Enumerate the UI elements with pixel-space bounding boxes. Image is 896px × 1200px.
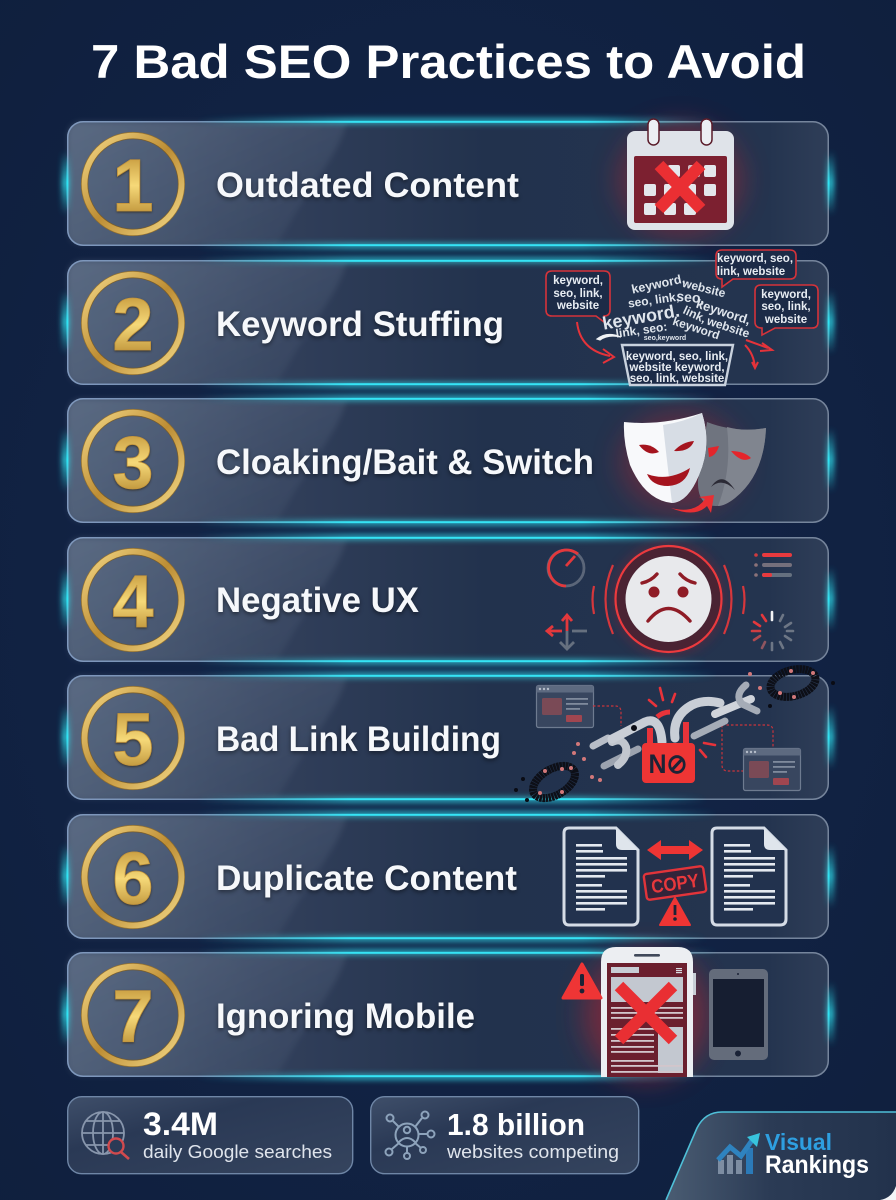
number badge 2: 2 xyxy=(112,283,154,366)
icon: globe with magnifier xyxy=(82,1112,129,1159)
panel: logo: Rankings xyxy=(765,1151,869,1179)
tablet xyxy=(709,969,768,1060)
number badge 1: 1 xyxy=(112,144,154,227)
icon: broken chain and lock xyxy=(514,664,835,805)
swirling words: keyword, xyxy=(630,272,686,297)
heading: outdated content: Outdated Content xyxy=(216,166,519,205)
icon: calendar with X xyxy=(618,119,742,236)
icon: sad face xyxy=(547,543,793,655)
number badge 5 xyxy=(81,686,185,790)
swirling words: link, xyxy=(681,303,709,326)
website windows xyxy=(536,686,594,728)
number badge 3 xyxy=(81,409,185,513)
icon: keyword cloud and bubbles: website keyword, xyxy=(628,362,725,374)
double arrow xyxy=(647,840,703,860)
swirling words: website xyxy=(680,276,727,300)
number badge 7: 7 xyxy=(112,975,154,1058)
heading: ignoring mobile: Ignoring Mobile xyxy=(216,997,475,1036)
swirling words: seo, xyxy=(676,288,705,306)
icon: keyword cloud and bubbles: seo, link, website xyxy=(630,373,724,385)
stat label: daily Google searches xyxy=(143,1142,332,1162)
icon: keyword cloud and bubbles: keyword, seo, link, xyxy=(626,351,728,363)
panel: 4 negative UX xyxy=(62,534,834,665)
panel: stat searches xyxy=(68,1097,353,1174)
panel: stat websites xyxy=(371,1097,639,1174)
number badge 4: 4 xyxy=(112,560,154,643)
heading: keyword stuffing: Keyword Stuffing xyxy=(216,305,504,344)
bubble left: website xyxy=(556,300,599,312)
swap arrow xyxy=(671,495,714,513)
bubble top right xyxy=(716,250,796,287)
title: 7 Bad SEO Practices to Avoid xyxy=(91,35,806,88)
bubble right: keyword, xyxy=(761,289,811,301)
number badge 5: 5 xyxy=(112,698,154,781)
bubble right: seo, link, xyxy=(761,301,811,313)
swirling words: keyword xyxy=(671,314,722,342)
stat label: websites competing xyxy=(446,1142,619,1162)
container xyxy=(622,345,733,385)
warning triangle xyxy=(563,964,601,998)
arrows xyxy=(577,322,772,368)
bubble left: keyword, xyxy=(553,275,603,287)
gauge xyxy=(548,550,584,586)
heading: negative ux: Negative UX xyxy=(216,581,420,620)
arrows xyxy=(547,615,587,649)
happy mask xyxy=(624,413,706,503)
panel: 3 cloaking xyxy=(62,395,834,526)
number badge 1 xyxy=(81,132,185,236)
stat value: 1.8 billion xyxy=(447,1107,585,1142)
phone xyxy=(601,947,696,1077)
icon: duplicate documents xyxy=(564,828,786,925)
swirling words: link, seo: xyxy=(615,319,668,341)
swirling words: seo, link, xyxy=(627,290,680,311)
panel: 7 ignoring mobile xyxy=(62,947,834,1080)
icon: keyword cloud and bubbles xyxy=(546,250,818,385)
lock xyxy=(642,722,695,783)
heading: duplicate content: Duplicate Content xyxy=(216,859,517,898)
shattered link right xyxy=(767,664,819,702)
panel: 1 outdated content xyxy=(62,118,834,249)
number badge 3: 3 xyxy=(112,421,154,504)
bubble top right: link, website xyxy=(717,266,785,278)
bubble left xyxy=(546,271,610,322)
swirling words: seo,keyword xyxy=(644,335,686,342)
document right xyxy=(712,828,786,925)
swirling words: keyword. xyxy=(601,300,681,334)
number badge 2 xyxy=(81,271,185,375)
number badge 6 xyxy=(81,825,185,929)
icon: theatre masks xyxy=(620,412,766,513)
logo text: Visual xyxy=(765,1129,832,1155)
bubble right xyxy=(755,285,818,335)
bubble left: seo, link, xyxy=(553,288,603,300)
panel: 6 duplicate content xyxy=(62,811,834,942)
swirling words: website xyxy=(704,313,752,341)
bubble top right: keyword, seo, xyxy=(717,253,793,265)
lock: N⊘ xyxy=(648,749,688,779)
list bars xyxy=(754,553,792,577)
copy stamp: COPY xyxy=(650,871,701,898)
sad mask xyxy=(698,422,766,506)
number badge 7 xyxy=(81,963,185,1067)
heading: cloaking: Cloaking/Bait & Switch xyxy=(216,443,594,482)
stat value: 3.4M xyxy=(143,1106,218,1142)
swirling words: keyword, xyxy=(694,296,753,328)
panel: logo xyxy=(666,1112,896,1200)
icon: network xyxy=(386,1112,434,1159)
chain xyxy=(593,685,757,766)
number badge 6: 6 xyxy=(112,837,154,920)
document left xyxy=(564,828,638,925)
number badge 4 xyxy=(81,548,185,652)
panel: 2 keyword stuffing xyxy=(62,250,834,388)
panel: 5 bad link building xyxy=(62,664,835,805)
heading: bad link building: Bad Link Building xyxy=(216,720,501,759)
loading spinner xyxy=(752,612,793,650)
bubble right: website xyxy=(764,314,807,326)
swirling words xyxy=(601,272,753,342)
warning triangle xyxy=(660,898,690,925)
icon: rising chart xyxy=(718,1133,760,1174)
icon: phone and tablet xyxy=(563,947,768,1080)
shattered link left xyxy=(528,759,580,805)
